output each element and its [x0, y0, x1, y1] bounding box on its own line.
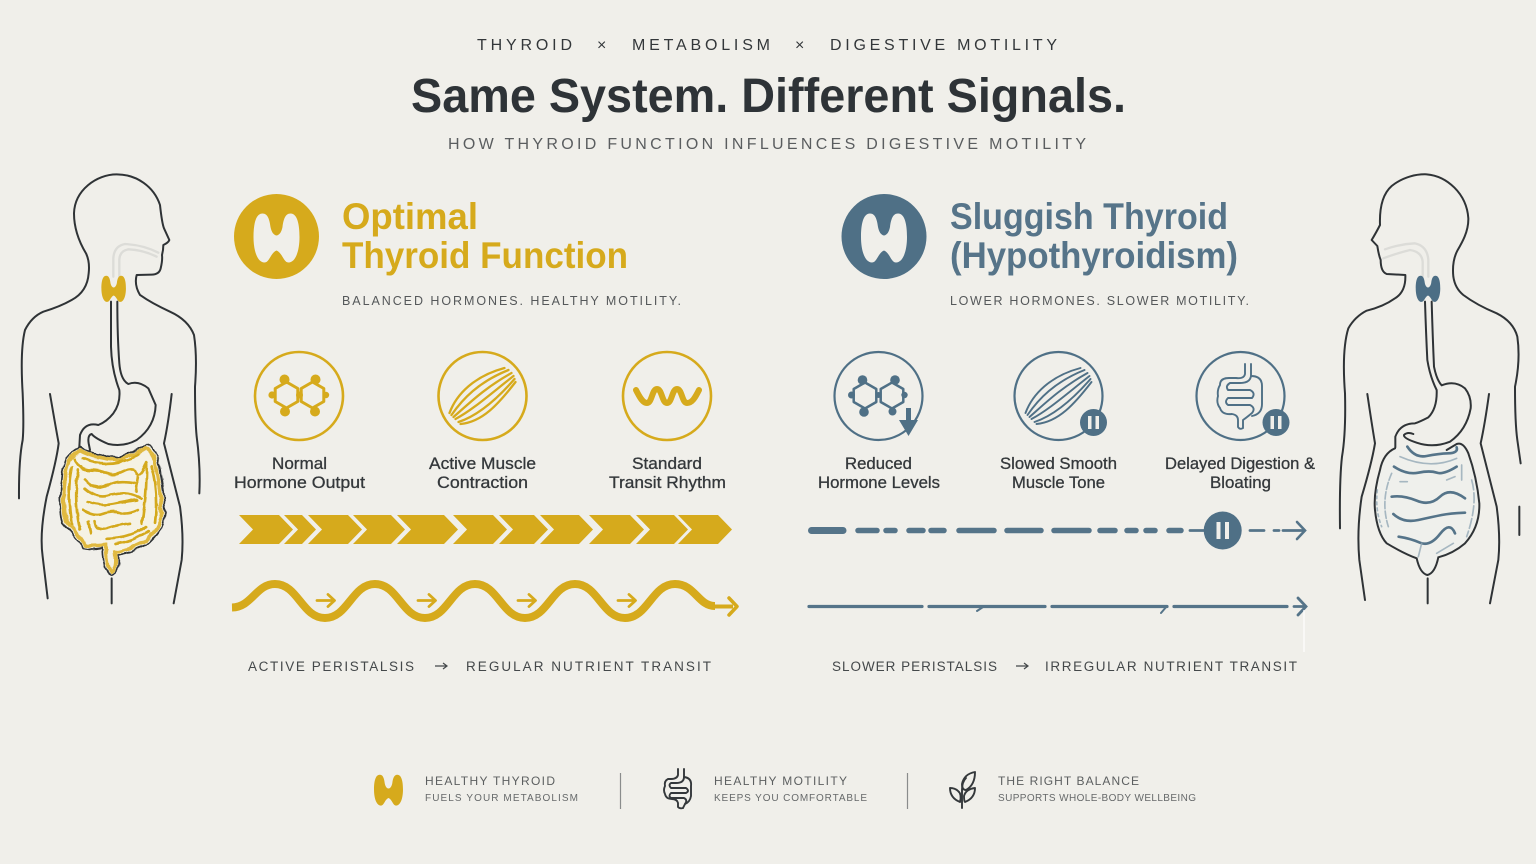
heading: sluggish	[950, 196, 1238, 276]
icon: hormone molecule gold	[255, 352, 343, 440]
label: reduced hormone levels: Reduced	[845, 454, 912, 473]
caption: optimal: ACTIVE PERISTALSIS	[248, 659, 414, 674]
bloated belly outline	[1375, 444, 1479, 575]
icon: slowed muscle	[1014, 352, 1107, 440]
caption: sluggish	[832, 659, 1297, 674]
heading: optimal: Thyroid Function	[342, 235, 628, 276]
caption: optimal: REGULAR NUTRIENT TRANSIT	[466, 659, 711, 674]
icon: delayed digestion gut	[1196, 352, 1290, 440]
icon: reduced hormone molecule	[834, 352, 922, 440]
label: slowed smooth muscle tone: Muscle Tone	[1012, 473, 1105, 492]
segmented straight arrow	[809, 598, 1306, 615]
title: Same System. Different Signals.	[411, 70, 1126, 123]
label: reduced hormone levels: Hormone Levels	[818, 473, 940, 492]
slate wiggles	[1392, 447, 1465, 544]
label: delayed digestion and bloating: Delayed Digestion &	[1165, 454, 1316, 473]
icon: thyroid badge gold	[234, 194, 319, 279]
peristalsis wave arrow	[232, 584, 737, 618]
text: healthy motility	[714, 774, 867, 804]
icon: rhythm wave gold	[623, 352, 711, 440]
label: standard transit rhythm: Transit Rhythm	[609, 473, 726, 492]
label: normal hormone output: Normal	[272, 454, 327, 473]
panel: sluggish thyroid	[809, 194, 1316, 674]
text: healthy thyroid: FUELS YOUR METABOLISM	[425, 793, 578, 804]
label: normal hormone output: Hormone Output	[234, 473, 365, 492]
label: reduced hormone levels	[818, 454, 940, 492]
label: active muscle contraction	[429, 454, 536, 492]
heading: optimal: Optimal	[342, 196, 478, 237]
top kicker: ×	[795, 37, 804, 54]
text: healthy thyroid	[425, 774, 578, 804]
text: the right balance	[998, 774, 1196, 804]
top kicker	[477, 37, 1057, 54]
dashed slow arrow with pause	[812, 512, 1305, 550]
icon: footer thyroid	[374, 775, 403, 806]
label: slowed smooth muscle tone: Slowed Smooth	[1000, 454, 1117, 473]
top kicker: ×	[597, 37, 606, 54]
label: slowed smooth muscle tone	[1000, 454, 1117, 492]
top kicker: DIGESTIVE MOTILITY	[830, 37, 1057, 54]
top kicker: METABOLISM	[632, 37, 770, 54]
icon: footer plant	[950, 772, 975, 808]
trachea	[1383, 243, 1428, 277]
trachea	[113, 244, 158, 277]
left body figure: optimal	[19, 174, 200, 603]
icon: footer gut	[664, 769, 691, 808]
esophagus and stomach	[1395, 302, 1471, 447]
label: delayed digestion and bloating	[1165, 454, 1316, 492]
top kicker: THYROID	[477, 37, 572, 54]
body outline	[1340, 174, 1521, 535]
subheading: optimal: BALANCED HORMONES. HEALTHY MOTILITY.	[342, 294, 681, 308]
caption: sluggish: IRREGULAR NUTRIENT TRANSIT	[1045, 659, 1297, 674]
torso lines	[42, 394, 183, 603]
esophagus and stomach	[79, 302, 156, 450]
thyroid gold	[101, 276, 126, 302]
label: standard transit rhythm: Standard	[632, 454, 702, 473]
text: the right balance: THE RIGHT BALANCE	[998, 774, 1139, 788]
caption: sluggish: SLOWER PERISTALSIS	[832, 659, 997, 674]
label: active muscle contraction: Contraction	[437, 473, 528, 492]
heading: sluggish: (Hypothyroidism)	[950, 235, 1238, 276]
heading: sluggish: Sluggish Thyroid	[950, 196, 1228, 237]
caption: optimal	[248, 659, 711, 674]
heading: optimal	[342, 196, 628, 276]
subtitle: HOW THYROID FUNCTION INFLUENCES DIGESTIVE MOTILITY	[448, 136, 1086, 153]
footer	[374, 769, 1196, 809]
panel: optimal thyroid function	[232, 194, 737, 674]
label: standard transit rhythm	[609, 454, 726, 492]
intestine	[60, 444, 165, 575]
icon: thyroid badge slate	[842, 194, 926, 279]
icon: muscle gold	[438, 352, 526, 440]
text: healthy thyroid: HEALTHY THYROID	[425, 774, 555, 788]
subheading: sluggish: LOWER HORMONES. SLOWER MOTILITY.	[950, 294, 1249, 308]
text: healthy motility: KEEPS YOU COMFORTABLE	[714, 793, 867, 804]
body outline	[19, 174, 200, 498]
label: active muscle contraction: Active Muscle	[429, 454, 536, 473]
torso lines	[1358, 394, 1499, 603]
chevron arrow band	[239, 515, 732, 544]
text: healthy motility: HEALTHY MOTILITY	[714, 774, 847, 788]
label: delayed digestion and bloating: Bloating	[1210, 473, 1271, 492]
text: the right balance: SUPPORTS WHOLE-BODY WELLBEING	[998, 793, 1196, 804]
thyroid slate	[1416, 276, 1440, 302]
right body figure: sluggish	[1340, 174, 1521, 603]
label: normal hormone output	[234, 454, 365, 492]
